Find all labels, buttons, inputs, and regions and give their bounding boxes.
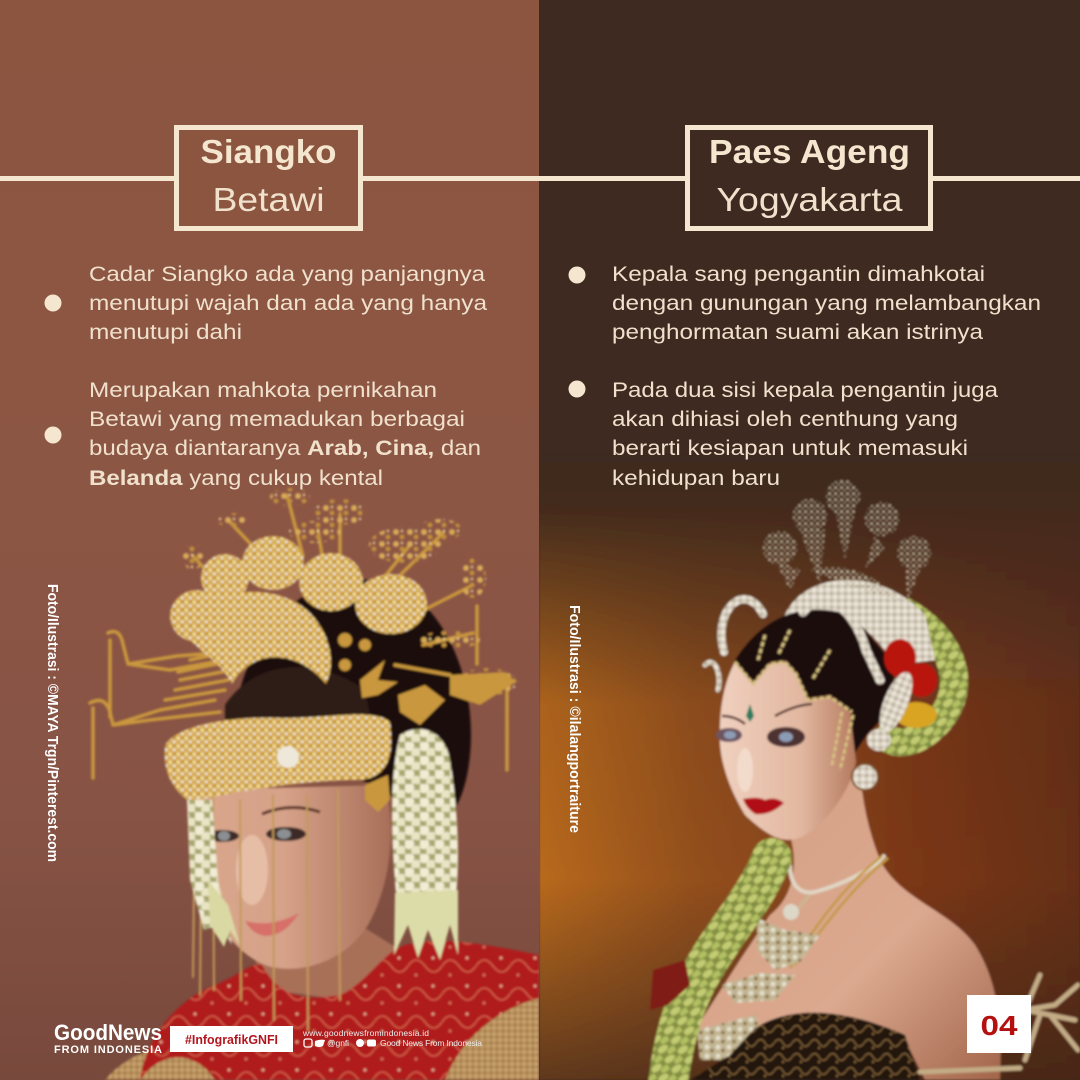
- silver ear ornaments: [867, 668, 919, 751]
- heading: Paes Ageng Yogyakarta: Yogyakarta: [716, 181, 903, 218]
- red lips: [743, 798, 784, 814]
- heading connector line: [0, 176, 1080, 181]
- bullet point: Paes Ageng crown meaning: penghormatan suami akan istrinya: [612, 320, 983, 344]
- crown sprays: [763, 480, 931, 600]
- website and social handles: [302, 1028, 482, 1048]
- hair ornament sprigs: [338, 633, 516, 812]
- batik bodice: [690, 1013, 920, 1080]
- eye left: [716, 728, 742, 742]
- panel: right background: [539, 0, 1080, 1080]
- eye right: [266, 827, 306, 841]
- bullet point: Siangko veil: Cadar Siangko ada yang panjangnya: [89, 262, 485, 286]
- jasmine strand left: [187, 800, 232, 945]
- red garland flower: [650, 960, 690, 1010]
- green jasmine garland: [668, 858, 772, 1080]
- logo: GoodNews From Indonesia: GoodNews: [54, 1020, 162, 1045]
- bullet point: Siangko cultural blend: [44, 378, 481, 490]
- yellow flowers: [895, 702, 937, 728]
- jasmine buds left: [208, 880, 240, 947]
- bullet point: Siangko cultural blend: Merupakan mahkota pernikahan: [89, 378, 437, 402]
- bullet point: Paes Ageng crown meaning: dengan gunungan yang melambangkan: [612, 291, 1041, 315]
- photo: bride wearing the Paes Ageng crown: [539, 455, 1080, 1080]
- logo: GoodNews From Indonesia: [54, 1020, 162, 1056]
- arm tie ornament: [920, 975, 1078, 1072]
- bullet point: Siangko veil: menutupi dahi: [89, 320, 242, 344]
- logo: GoodNews From Indonesia: FROM INDONESIA: [54, 1044, 162, 1056]
- collar lace: [697, 918, 820, 1060]
- bullet point: Siangko cultural blend: Betawi yang memadukan berbagai: [89, 407, 465, 431]
- jasmine strand right: [392, 729, 458, 895]
- bullet point: Siangko cultural blend: budaya diantaranya Arab, Cina, dan: [89, 436, 481, 460]
- lips: [245, 913, 299, 936]
- red flowers: [884, 639, 937, 697]
- warm studio backdrop: [539, 520, 1080, 1080]
- black paes hair: [734, 608, 895, 752]
- gold paes outline: [735, 630, 853, 770]
- photo: bride wearing the Siangko crown: [90, 488, 539, 1080]
- eye right: [767, 727, 805, 747]
- heading: Paes Ageng Yogyakarta: Paes Ageng: [709, 133, 910, 170]
- hashtag badge: #InfografikGNFI: [185, 1033, 278, 1047]
- panel: left background: [0, 0, 539, 1080]
- gold shoulder cloth: [105, 998, 539, 1080]
- page number: [967, 995, 1031, 1053]
- black hair and bun: [240, 580, 471, 827]
- bullet point: Siangko veil: [44, 262, 487, 344]
- page number: 04: [980, 1010, 1018, 1041]
- website and social handles: www.goodnewsfromindonesia.id: [302, 1028, 429, 1038]
- bullet point: Siangko cultural blend: Belanda yang cukup kental: [89, 466, 383, 490]
- website and social handles: @gnfi: [327, 1038, 349, 1048]
- white jasmine crown: [783, 580, 935, 665]
- green braided hair bun: [888, 612, 954, 742]
- bullet point: Siangko veil: menutupi wajah dan ada yang hanya: [89, 291, 487, 315]
- neck and shoulder: [695, 770, 1001, 1080]
- gold jewel clusters: [170, 536, 427, 773]
- bullet point: centhung meaning: kehidupan baru: [612, 466, 780, 490]
- hashtag badge: [170, 1026, 293, 1052]
- heading: Siangko Betawi: Betawi: [212, 181, 324, 218]
- photo credit right: Foto/Ilustrasi : ©ilalangportraiture: [566, 605, 582, 833]
- red kebaya: [140, 941, 539, 1080]
- bullet point: Paes Ageng crown meaning: [568, 262, 1041, 344]
- heading: Siangko Betawi: Siangko: [200, 133, 336, 170]
- necklaces: [790, 855, 888, 968]
- bindi: [746, 704, 754, 722]
- necklace pendant: [783, 904, 799, 920]
- gold sticks and arms: [90, 495, 507, 1030]
- top gold filigree sprays: [183, 488, 517, 696]
- face: [195, 785, 391, 969]
- crown band: [164, 715, 391, 802]
- silver hair arcs: [705, 599, 880, 690]
- earring: [852, 764, 878, 790]
- neck: [255, 925, 400, 1000]
- bullet point: centhung meaning: berarti kesiapan untuk memasuki: [612, 436, 968, 460]
- face: [720, 662, 856, 840]
- eye left: [205, 830, 239, 842]
- website and social handles: Good News From Indonesia: [380, 1038, 482, 1048]
- bullet point: Paes Ageng crown meaning: Kepala sang pengantin dimahkotai: [612, 262, 985, 286]
- heading: Siangko Betawi: [176, 128, 360, 228]
- jasmine buds right: [394, 890, 458, 960]
- heading: Paes Ageng Yogyakarta: [688, 128, 930, 228]
- bullet point: centhung meaning: Pada dua sisi kepala pengantin juga: [612, 378, 998, 402]
- photo credit left: Foto/Ilustrasi : ©MAYA Trgn/Pinterest.com: [44, 584, 60, 862]
- bullet point: centhung meaning: [568, 378, 998, 490]
- bullet point: centhung meaning: akan dihiasi oleh centhung yang: [612, 407, 958, 431]
